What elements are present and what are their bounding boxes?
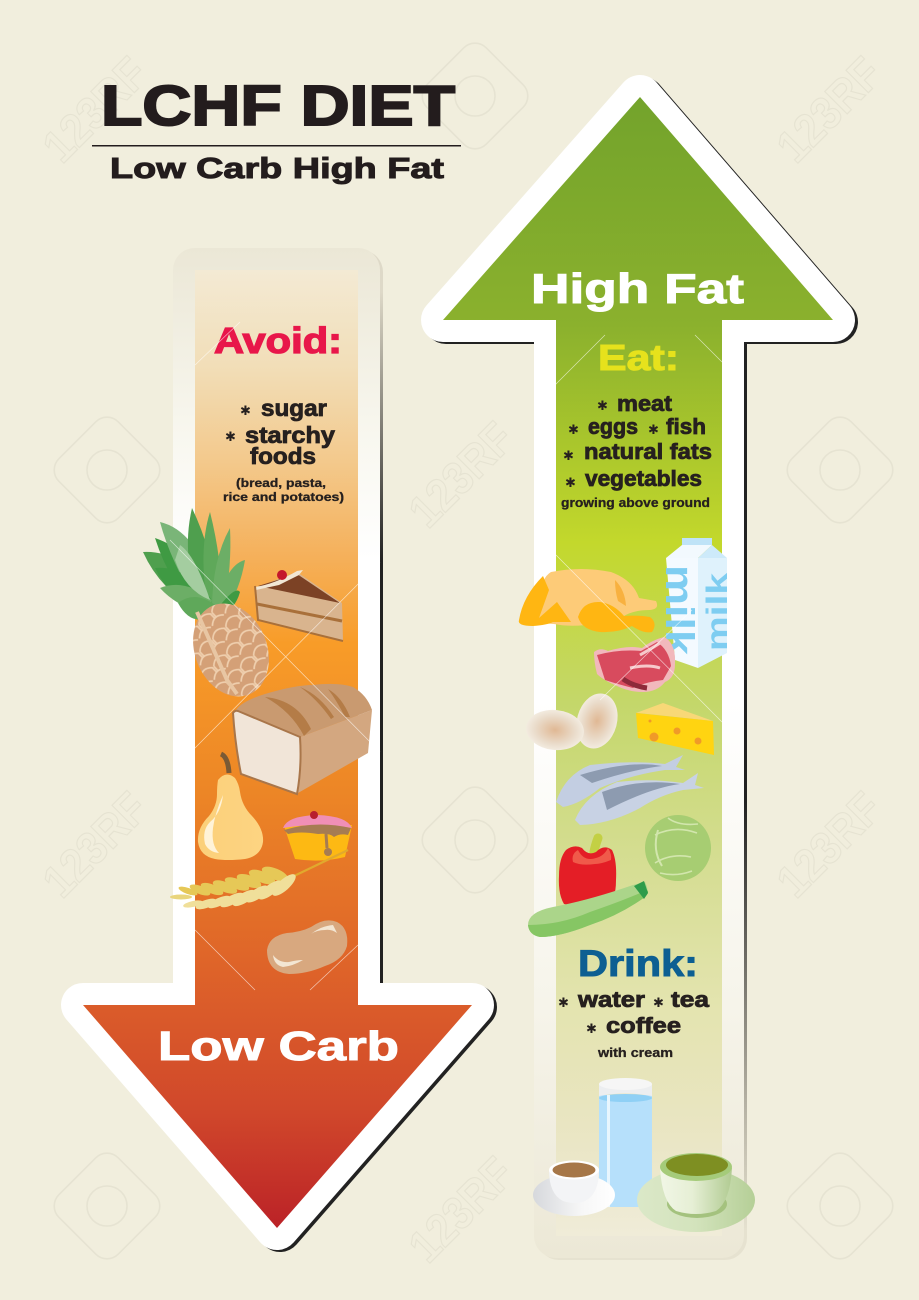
- drink items: with cream: [597, 1045, 673, 1060]
- watermarks: 123RF: [766, 47, 891, 172]
- icon: pear: [198, 754, 263, 860]
- icon: coffee cup: [533, 1160, 615, 1216]
- icon: potato: [267, 920, 347, 974]
- icon: wheat: [170, 850, 348, 912]
- eat list: [561, 337, 712, 510]
- icon: milk carton: [657, 538, 734, 668]
- eat items: ✱: [565, 476, 576, 491]
- icon: muffin: [283, 811, 352, 861]
- drink items: ✱: [558, 996, 569, 1011]
- icon: chicken: [519, 569, 657, 632]
- eat items: ✱: [597, 399, 608, 414]
- arrow outline: [443, 97, 833, 1236]
- eat items: fish: [666, 414, 706, 439]
- drink list: [558, 943, 710, 1060]
- watermarks: 123RF: [32, 47, 157, 172]
- watermarks: 123RF: [398, 1147, 523, 1272]
- avoid list: [214, 320, 344, 504]
- drink heading: Drink:: [578, 943, 698, 984]
- icon: milk carton: milk: [701, 573, 734, 651]
- avoid items: ✱: [240, 404, 251, 419]
- icon: cheese: [636, 703, 714, 755]
- icon: milk carton: milk: [657, 565, 701, 656]
- drink items: ✱: [653, 996, 664, 1011]
- icon: fish pair: [556, 755, 704, 825]
- drink items: water: [577, 987, 645, 1012]
- watermarks: 123RF: [398, 412, 523, 537]
- eat items: growing above ground: [561, 495, 710, 510]
- eat items: ✱: [648, 423, 659, 438]
- eat heading: Eat:: [598, 337, 679, 378]
- eat items: ✱: [563, 449, 574, 464]
- eat items: natural fats: [584, 439, 712, 464]
- avoid items: foods: [250, 443, 316, 469]
- drink items: ✱: [586, 1022, 597, 1037]
- avoid items: sugar: [261, 395, 327, 421]
- icon: bread loaf: [233, 684, 372, 794]
- icon: green tea cup: [637, 1153, 755, 1232]
- avoid items: rice and potatoes): [223, 490, 344, 504]
- title: LCHF DIET: [101, 74, 455, 138]
- subtitle: Low Carb High Fat: [110, 153, 444, 185]
- arrow fill: [443, 97, 833, 1236]
- arrow shadow: [86, 272, 475, 1230]
- arrow label: Low Carb: [158, 1023, 399, 1069]
- drink items: tea: [671, 987, 710, 1012]
- icon: zucchini: [528, 881, 648, 937]
- icon: water glass: [599, 1078, 652, 1207]
- avoid items: starchy: [245, 422, 335, 448]
- eat items: eggs: [588, 414, 638, 439]
- avoid heading: Avoid:: [214, 320, 342, 361]
- icon: pineapple: [143, 508, 282, 708]
- icon: cabbage: [645, 815, 711, 881]
- icon: red pepper: [559, 838, 616, 906]
- eat items: vegetables: [585, 466, 702, 491]
- title block: [92, 74, 461, 185]
- title rule: [92, 145, 461, 146]
- eat items: [561, 391, 712, 510]
- icon: meat steak: [594, 637, 675, 692]
- watermarks: 123RF: [32, 782, 157, 907]
- icon: cake slice: [255, 570, 343, 641]
- avoid items: [223, 395, 344, 504]
- drink items: [558, 987, 710, 1060]
- avoid items: (bread, pasta,: [236, 476, 326, 490]
- arrow shadow: [446, 99, 836, 1238]
- watermarks: 123RF: [766, 782, 891, 907]
- arrow label: High Fat: [531, 265, 744, 312]
- arrow fill: [83, 270, 472, 1228]
- eat items: meat: [617, 391, 673, 416]
- arrow outline: [83, 270, 472, 1228]
- drink items: coffee: [606, 1013, 681, 1038]
- icon: eggs: [524, 689, 624, 753]
- avoid items: ✱: [225, 430, 236, 445]
- eat items: ✱: [568, 423, 579, 438]
